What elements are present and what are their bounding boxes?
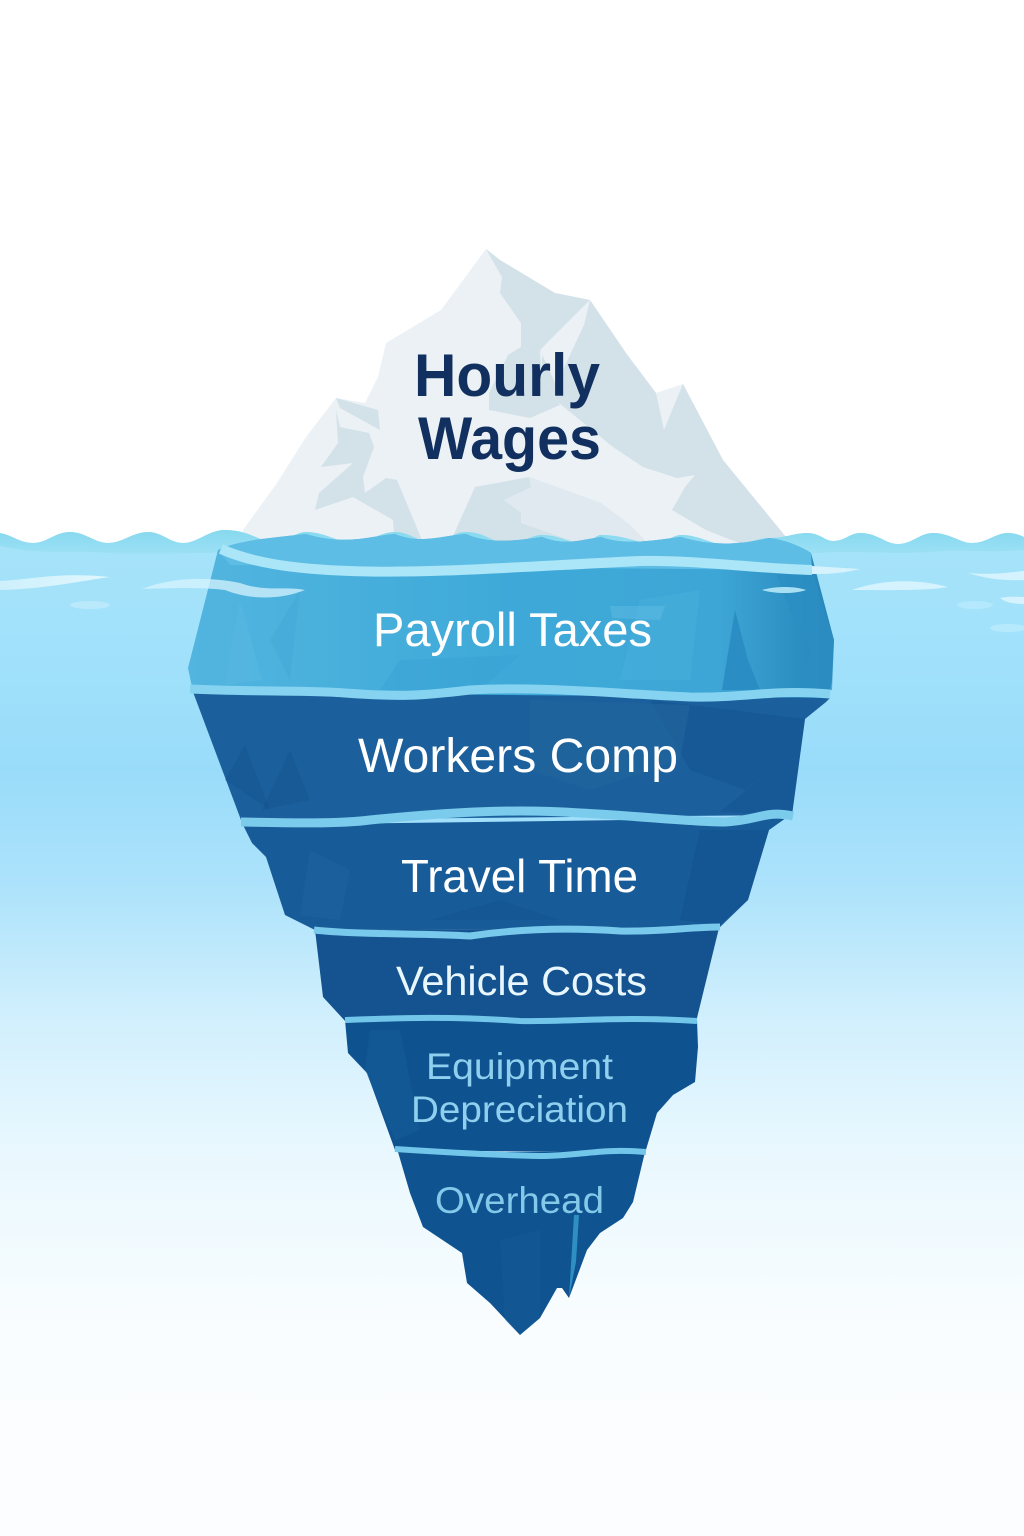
band: workers / travel [241, 811, 793, 823]
layer: workers comp [193, 692, 830, 820]
label: Overhead: Overhead [435, 1180, 604, 1221]
band: travel / vehicle [314, 927, 720, 936]
sea gradient [0, 530, 1024, 1536]
equipment facets [365, 1030, 420, 1140]
travel time facets [300, 830, 769, 925]
label: Travel Time: Travel Time [401, 850, 638, 902]
layer: payroll taxes [188, 534, 834, 700]
heading: Hourly Wages [414, 342, 601, 472]
label: Workers Comp: Workers Comp [358, 730, 678, 783]
overhead crack highlight [569, 1215, 579, 1298]
water body [0, 530, 1024, 1536]
band: payroll / workers [190, 689, 830, 697]
heading line 1: Hourly [414, 342, 601, 409]
ice shadow facets [315, 249, 786, 545]
band: equipment / overhead [395, 1149, 646, 1156]
workers comp facets [225, 700, 805, 815]
background: sky [0, 0, 1024, 540]
payroll taxes top wave facet [218, 534, 812, 570]
wave crest band [0, 530, 1024, 558]
label: Payroll Taxes: Payroll Taxes [373, 603, 652, 656]
overhead facets [500, 1230, 540, 1335]
iceberg above water [243, 249, 786, 560]
heading line 2: Wages [418, 405, 601, 472]
label: Vehicle Costs: Vehicle Costs [396, 958, 647, 1004]
ice ridge highlight [540, 300, 590, 385]
label line 2: Depreciation [411, 1089, 628, 1130]
iceberg below water [188, 534, 834, 1335]
layer: travel time [243, 818, 786, 930]
band: vehicle / equipment [345, 1018, 697, 1021]
band: waterline [221, 549, 812, 572]
layer divider bands [190, 549, 830, 1156]
layer: equipment depreciation [345, 1020, 698, 1153]
layer: vehicle costs [315, 928, 719, 1022]
payroll taxes facets [225, 570, 834, 692]
ice peak silhouette [243, 249, 786, 560]
layer: overhead [398, 1152, 645, 1335]
surface foam highlights [0, 566, 1024, 632]
label: Equipment Depreciation [411, 1046, 628, 1130]
label line 1: Equipment [426, 1046, 614, 1087]
